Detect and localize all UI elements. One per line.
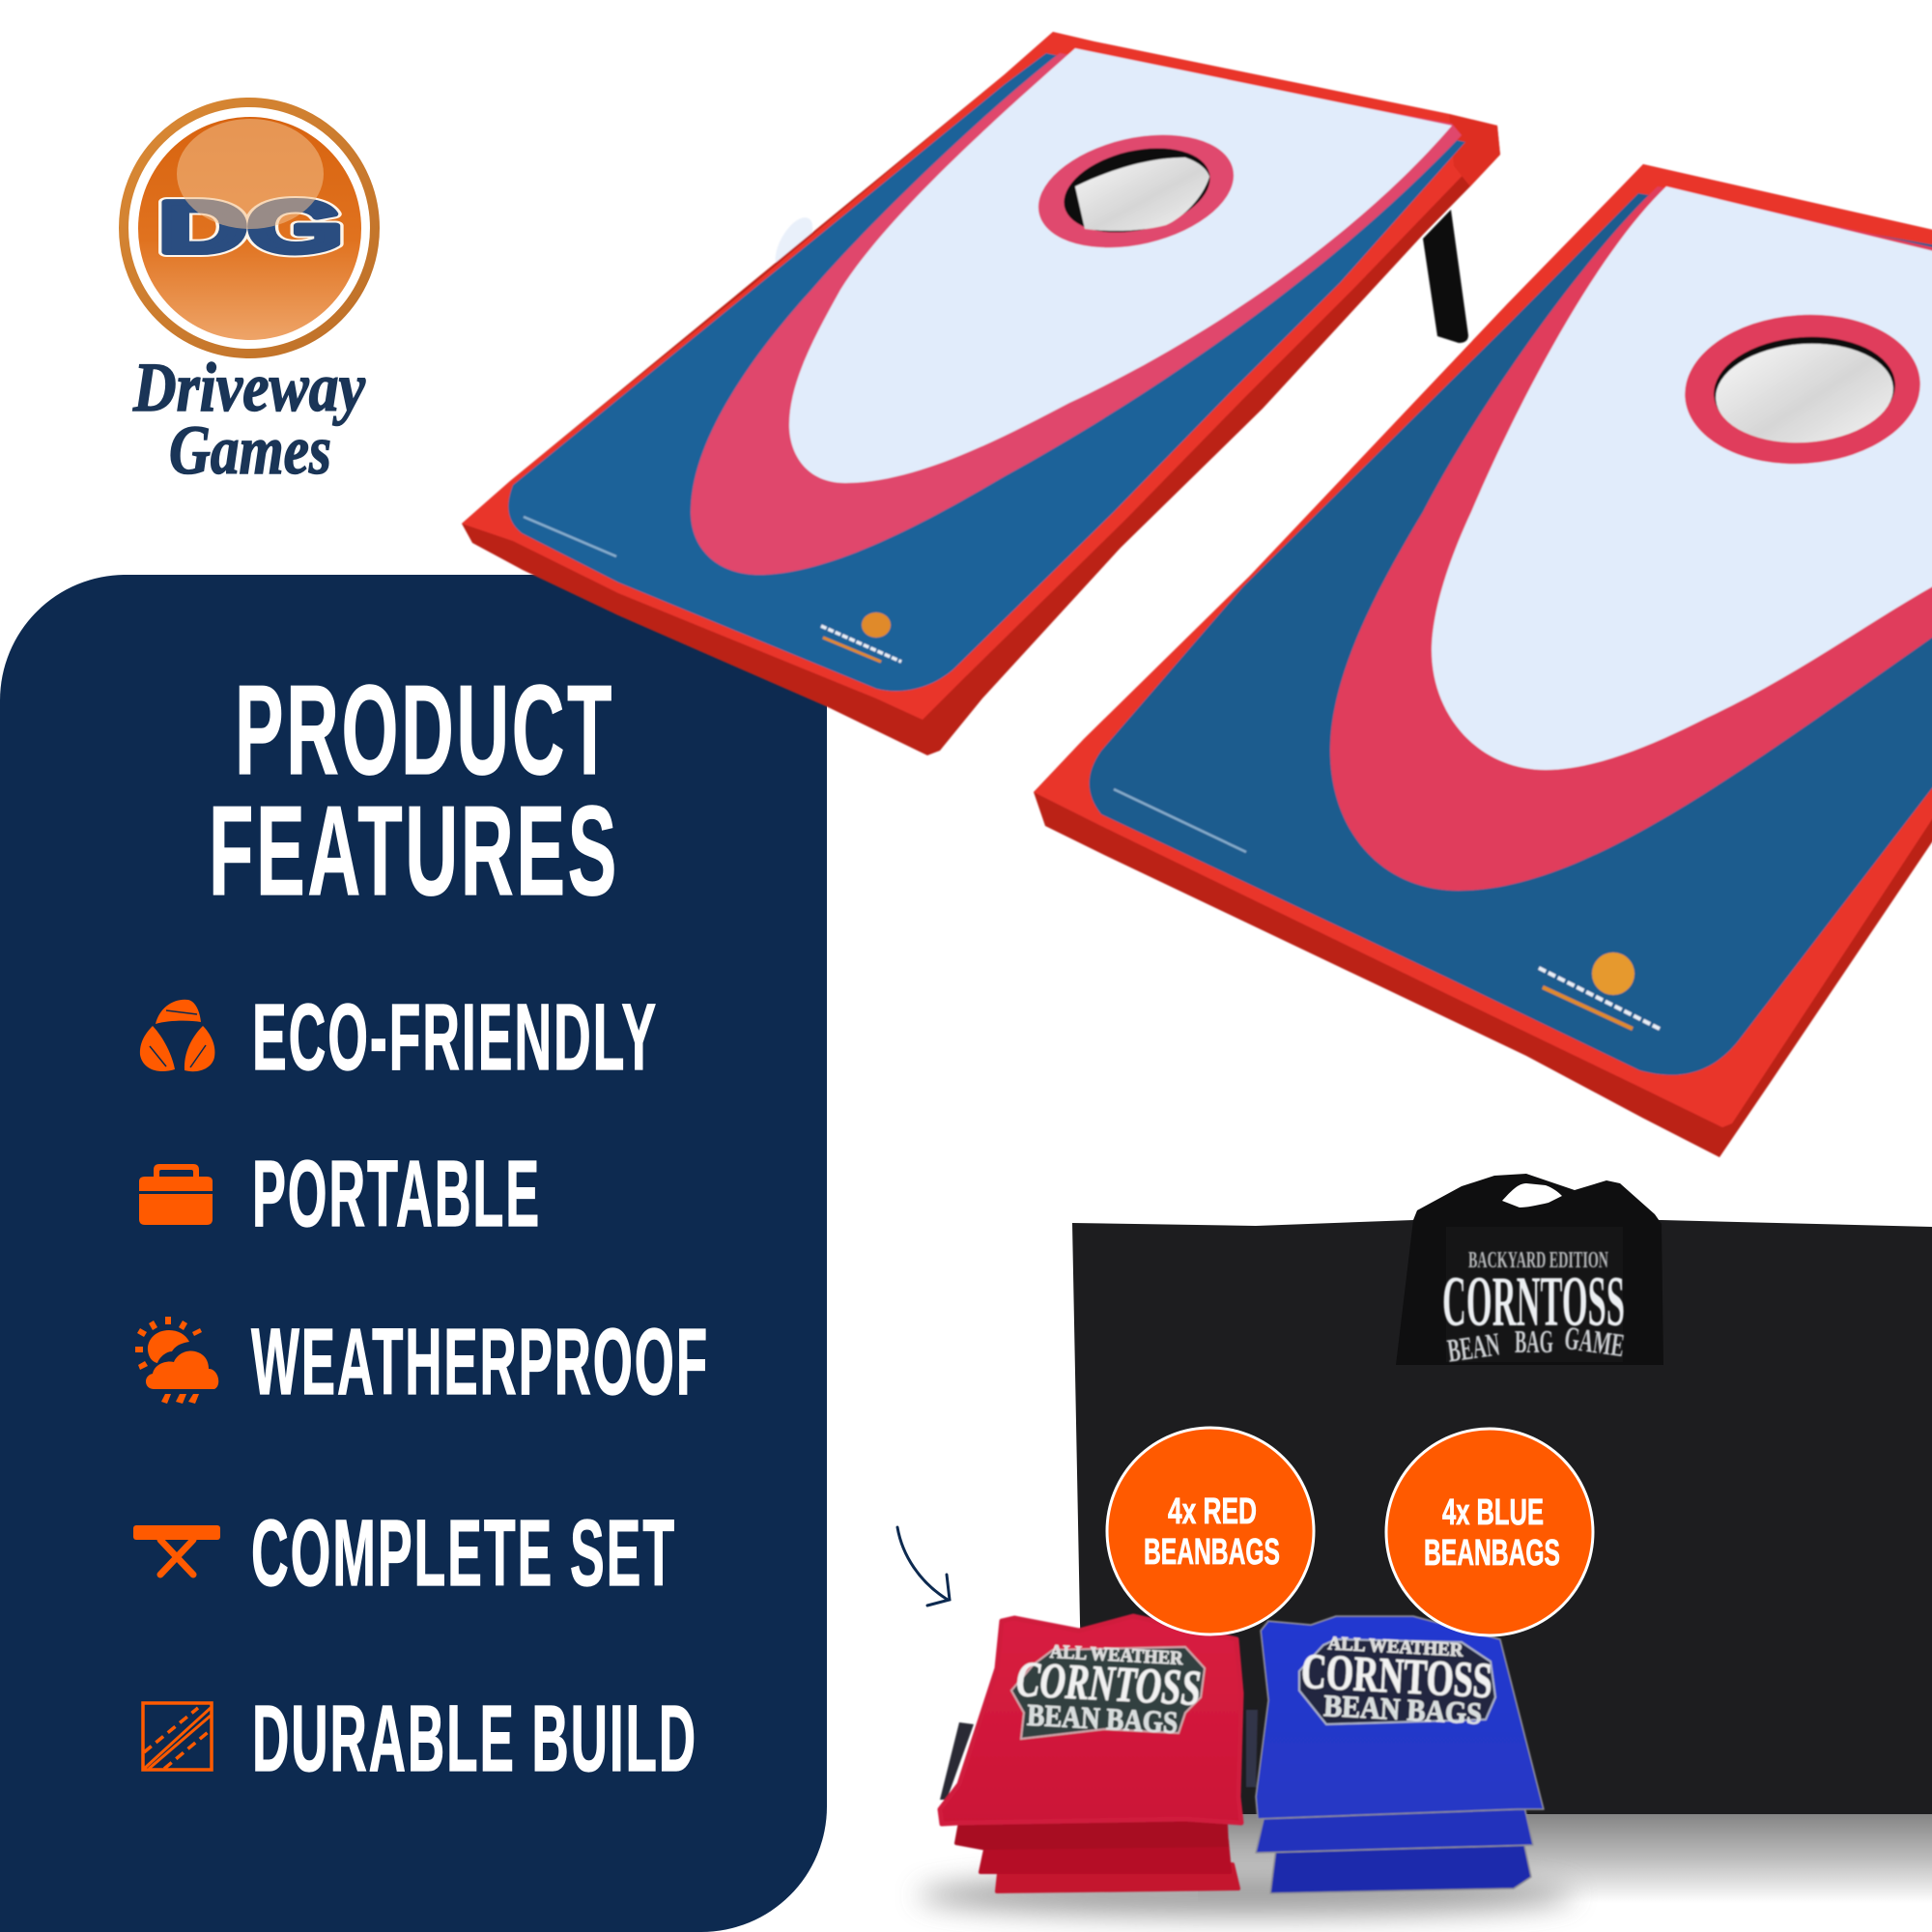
- beanbags: red stack: [940, 1616, 1241, 1891]
- board mini logo: [1539, 952, 1660, 1029]
- heading: PRODUCT: [235, 659, 614, 801]
- bag tag: [1246, 1710, 1258, 1787]
- callout: 4x red beanbags: 4x RED: [1168, 1492, 1257, 1532]
- icon: recycling leaves: [140, 1000, 214, 1071]
- feature: complete set: [133, 1500, 676, 1605]
- hole: [1027, 117, 1245, 266]
- feature: weatherproof: [135, 1309, 709, 1414]
- feature: portable: [139, 1141, 541, 1246]
- icon: toolbox: [139, 1164, 213, 1225]
- bag body: [1072, 1220, 1932, 1814]
- bag tag text: BAG: [1515, 1324, 1553, 1360]
- icon: stitched board: [143, 1703, 212, 1770]
- callout: 4x red beanbags: BEANBAGS: [1144, 1532, 1280, 1573]
- arrow to beanbags: [897, 1527, 950, 1605]
- bag logo: ALL WEATHER: [1049, 1641, 1184, 1669]
- callout: 4x blue beanbags: 4x BLUE: [1442, 1492, 1544, 1533]
- bag tag text: BACKYARD EDITION: [1468, 1248, 1608, 1273]
- label: COMPLETE SET: [251, 1500, 676, 1605]
- feature: eco-friendly: [140, 984, 658, 1090]
- bag tag: [940, 1722, 974, 1800]
- board small print: [524, 517, 616, 556]
- floor shadow: [1198, 1814, 1932, 1903]
- white target area: [1432, 186, 1932, 770]
- callout: 4x blue beanbags: BEANBAGS: [1424, 1533, 1560, 1574]
- bag logo: CORNTOSS: [1300, 1644, 1493, 1709]
- logo wordmark: Driveway: [132, 349, 366, 426]
- cornhole board: left: [462, 32, 1500, 755]
- logo badge: DG: [158, 186, 343, 268]
- cornhole board: right: [1034, 164, 1932, 1157]
- bag logo: BEAN BAGS: [1322, 1688, 1483, 1731]
- label: PORTABLE: [252, 1141, 541, 1246]
- panel: product features: [0, 575, 827, 1932]
- board mini logo: [821, 612, 901, 662]
- label: DURABLE BUILD: [252, 1686, 697, 1791]
- white target area: [789, 48, 1452, 483]
- lower bags: [1256, 1802, 1533, 1893]
- icon: folding table: [133, 1525, 220, 1575]
- bag tag text: BEAN: [1445, 1326, 1502, 1370]
- red swoosh: [691, 53, 1462, 575]
- logo wordmark: Games: [169, 412, 331, 489]
- label: WEATHERPROOF: [251, 1309, 709, 1414]
- bag tag text: [1442, 1248, 1627, 1370]
- board surface: [1090, 193, 1932, 1075]
- board frame: [1034, 164, 1932, 1157]
- bag logo: ALL WEATHER: [1327, 1633, 1464, 1662]
- board surface: [508, 53, 1465, 692]
- bag logo: [1011, 1639, 1205, 1741]
- top bag: [940, 1616, 1241, 1824]
- heading: FEATURES: [209, 780, 619, 922]
- logo badge: [124, 102, 375, 354]
- bag handle and tag: [1396, 1174, 1663, 1365]
- bag logo: CORNTOSS: [1015, 1652, 1202, 1717]
- carry bag: CORNTOSS: [1442, 1263, 1625, 1342]
- board small print: [1114, 789, 1246, 852]
- lower bags: [956, 1806, 1238, 1891]
- beanbags: blue stack: [1246, 1616, 1544, 1893]
- bag logo: BEAN BAGS: [1026, 1697, 1179, 1740]
- feature: durable build: [143, 1686, 697, 1791]
- top bag: [1256, 1616, 1544, 1819]
- callout: 4x red beanbags: [1107, 1428, 1314, 1634]
- board frame: [462, 32, 1500, 755]
- logo: Driveway Games: [124, 102, 375, 489]
- hole: [1680, 307, 1925, 471]
- bag logo: [1298, 1632, 1495, 1731]
- carry bag: [1072, 1174, 1932, 1903]
- bag tag text: GAME: [1562, 1321, 1627, 1364]
- board leg: [1423, 210, 1468, 343]
- beanbag shadow: [918, 1874, 1575, 1917]
- label: ECO-FRIENDLY: [252, 984, 658, 1090]
- callout: 4x blue beanbags: [1386, 1429, 1593, 1635]
- heading: [209, 659, 619, 922]
- logo wordmark: [132, 349, 366, 489]
- logo badge: DG: [158, 186, 343, 268]
- red swoosh: [1330, 186, 1932, 891]
- icon: sun and rain cloud: [135, 1317, 218, 1404]
